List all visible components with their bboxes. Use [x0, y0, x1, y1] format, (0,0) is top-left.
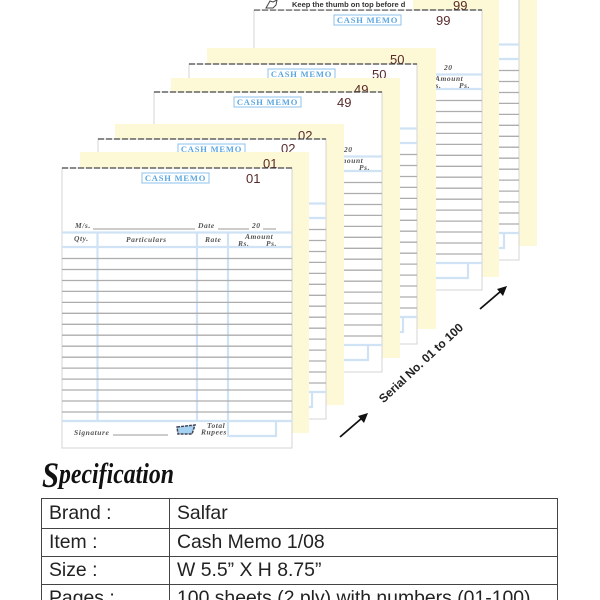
white sheet: serial 49: 20: [343, 145, 353, 154]
specification table: Brand :: [49, 502, 112, 524]
white sheet: serial 02: 02: [281, 141, 295, 156]
yellow sheet: serial 02: [115, 124, 344, 405]
yellow sheet: rearmost duplicate: [308, 0, 537, 246]
table header labels: Particulars: [126, 235, 167, 244]
specification table: Salfar: [177, 502, 228, 524]
specification table: W 5.5” X H 8.75”: [177, 559, 321, 581]
table header labels: [74, 232, 277, 248]
serial number 01: 01: [246, 171, 260, 186]
yellow sheet: serial 01: 01: [263, 156, 277, 171]
specification table: Size :: [49, 559, 98, 581]
customer and date line: 20: [251, 221, 261, 230]
white sheet: serial 99: Rs.: [429, 81, 441, 90]
white sheet: serial 99: 99: [436, 13, 450, 28]
white sheet: serial 02: [98, 139, 326, 419]
white sheet: serial 50: 50: [372, 67, 386, 82]
specification table: Item :: [49, 531, 98, 553]
yellow sheet: serial 49: 49: [354, 82, 368, 97]
white sheet: serial 01, front form: [62, 168, 292, 448]
white sheet: serial 49: Ps.: [359, 163, 370, 172]
yellow sheet: serial 50: 50: [390, 52, 404, 67]
white sheet: serial 99: 20: [443, 63, 453, 72]
white sheet: serial 99: CASH MEMO: [337, 15, 398, 25]
white sheet: serial 99: Amount: [434, 74, 464, 83]
instruction strip: keep the thumb: [253, 0, 413, 10]
white sheet: rearmost original: [290, 0, 519, 260]
total rupees label: Total: [207, 421, 226, 430]
white sheet: serial 49: [154, 92, 382, 372]
signature line: Signature: [74, 428, 109, 437]
serial number label: Serial No. 01 to 100: [376, 320, 466, 406]
instruction strip: keep the thumb: Keep the thumb on top before d: [292, 0, 406, 9]
icon: blue logo: [177, 425, 195, 434]
table header labels: Ps.: [266, 239, 277, 248]
white sheet: serial 99: Ps.: [459, 81, 470, 90]
yellow sheet: serial 02: 02: [298, 128, 312, 143]
white sheet: serial 50: [189, 64, 417, 344]
yellow sheet: serial 50: [207, 48, 436, 329]
white sheet: serial 50: CASH MEMO: [271, 69, 332, 79]
white sheet: serial 49: Amount: [334, 156, 364, 165]
table header labels: Amount: [244, 232, 274, 241]
customer and date line: [74, 221, 276, 230]
table header labels: Rs.: [237, 239, 249, 248]
white sheet: serial 99: [254, 10, 482, 290]
white sheet: serial 02: CASH MEMO: [181, 144, 242, 154]
customer and date line: M/s.: [74, 221, 91, 230]
white sheet: rearmost original: Amount: [465, 44, 495, 53]
total rupees label: Rupees: [200, 428, 227, 436]
total rupees label: [200, 421, 227, 436]
table header labels: Rate: [204, 235, 221, 244]
arrow: lower serial direction: [340, 413, 368, 437]
table header labels: Qty.: [74, 234, 89, 243]
specification heading: Specification: [42, 455, 174, 495]
specification table: [41, 498, 558, 600]
table ruled rows: [62, 258, 292, 412]
specification table: Cash Memo 1/08: [177, 531, 325, 553]
table blue rules: [62, 232, 292, 436]
white sheet: serial 49: 49: [337, 95, 351, 110]
yellow sheet: serial 49: [171, 78, 400, 358]
cash memo heading box: CASH MEMO: [145, 173, 206, 183]
yellow sheet: serial 99: [270, 0, 499, 277]
white sheet: serial 49: CASH MEMO: [237, 97, 298, 107]
arrow: upper serial direction: [480, 286, 507, 309]
yellow sheet: serial 01: [80, 152, 309, 433]
signature line: [74, 428, 168, 437]
customer and date line: Date: [197, 221, 215, 230]
